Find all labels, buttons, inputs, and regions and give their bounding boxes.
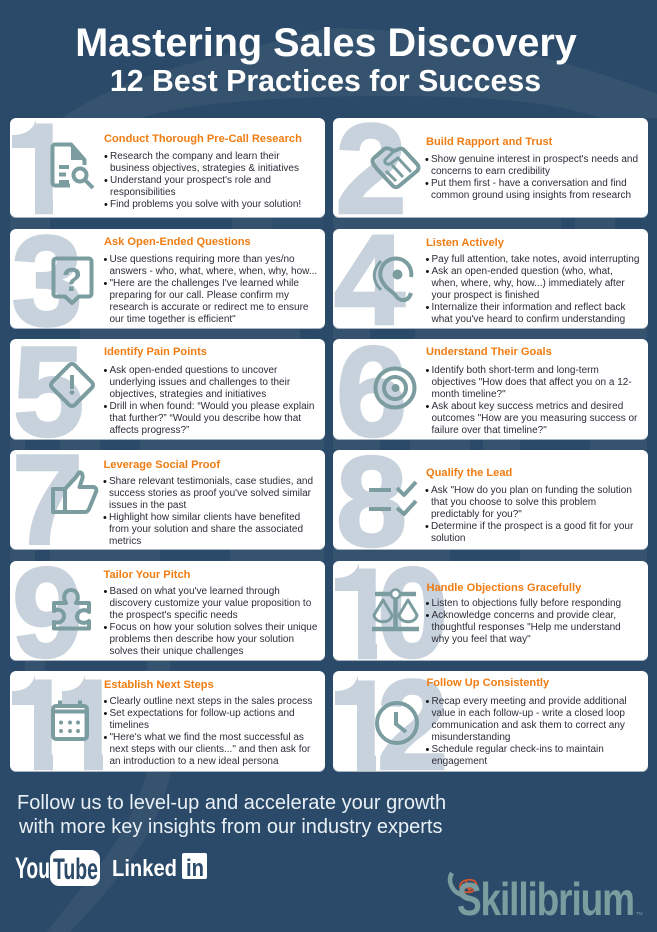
heading: Build Rapport and Trust: [426, 136, 552, 148]
icon: checklist: [369, 482, 416, 514]
heading: Identify Pain Points: [104, 346, 207, 358]
text block: metrics: [109, 536, 141, 547]
number 10: [335, 563, 444, 660]
text block: Set expectations for follow-up actions and: [110, 708, 295, 719]
text block: "Here are the challenges I've learned while: [110, 278, 299, 289]
text block: "Here's what we find the most successful as: [110, 732, 304, 743]
text block: Drill in when found: “Would you please explain: [110, 401, 314, 412]
text block: Based on what you've learned through: [110, 586, 280, 597]
text block: our time together is efficient": [110, 314, 236, 325]
text block: discovery customize your value proposition to: [110, 598, 311, 609]
text block: thoughtful responses "Help me understand: [432, 622, 621, 633]
text block: Listen to objections fully before responding: [432, 598, 621, 609]
text block: Pay full attention, take notes, avoid interrupting: [432, 254, 639, 265]
call to action text: Follow us to level-up and accelerate your growth: [17, 792, 446, 814]
heading: Establish Next Steps: [104, 679, 214, 691]
text block: solution: [431, 533, 465, 544]
LinkedIn logo: in: [186, 855, 204, 882]
panel: 10 handle objections: •: [426, 598, 429, 610]
text block: issues in the past: [109, 500, 186, 511]
text block: [103, 476, 313, 547]
text block: Ask an open-ended question (who, what,: [432, 266, 613, 277]
text block: Highlight how similar clients have benefited: [109, 512, 300, 523]
text block: answers - who, what, where, when, why, how...: [110, 266, 317, 277]
panel: 1 pre-call research: •: [104, 199, 108, 211]
text block: next steps with our clients..." and then ask for: [110, 744, 310, 755]
text block: Determine if the prospect is a good fit for your: [431, 521, 633, 532]
heading: Handle Objections Gracefully: [426, 582, 581, 594]
panel: 5 pain points: •: [104, 365, 107, 377]
text block: your prospect is finished: [432, 290, 539, 301]
panel: 1 pre-call research: •: [104, 175, 108, 187]
number 1: [12, 120, 53, 214]
panel: 12 follow up: •: [426, 696, 429, 708]
panel: 4 listen actively: •: [426, 254, 429, 266]
heading: Listen Actively: [426, 237, 504, 249]
text block: success stories as proof you've solved similar: [109, 488, 311, 499]
text block: affects progress?”: [110, 425, 189, 436]
panel: 9 tailor your pitch: •: [104, 622, 107, 634]
panel: 3 open-ended questions: •: [104, 278, 107, 290]
panel: 2 rapport and trust: •: [425, 178, 429, 190]
text block: what you've heard to confirm understanding: [432, 314, 625, 325]
text block: [104, 365, 314, 436]
text block: Use questions requiring more than yes/no: [110, 254, 295, 265]
icon: thumbs up: [53, 472, 96, 512]
heading: Tailor Your Pitch: [104, 569, 190, 581]
heading: Ask Open-Ended Questions: [104, 236, 251, 248]
text block: objectives "How does that affect you on a 12-: [432, 377, 632, 388]
panel: 12 follow up: [333, 671, 648, 771]
panel: 4 listen actively: •: [426, 302, 429, 314]
heading: Follow Up Consistently: [426, 677, 549, 689]
text block: value in each follow-up - write a closed loop: [432, 708, 625, 718]
icon: calendar: [53, 700, 87, 739]
text block: month timeline?": [432, 389, 506, 400]
text block: Focus on how your solution solves their unique: [110, 622, 317, 633]
text block: [426, 365, 638, 436]
text block: Acknowledge concerns and provide clear,: [432, 610, 616, 621]
panel: 10 handle objections: [333, 561, 648, 660]
text block: misunderstanding: [432, 732, 510, 742]
panel: 11 next steps: [10, 671, 325, 771]
panel: 1 pre-call research: [10, 118, 325, 217]
text block: research is accurate or redirect me to ensure: [110, 302, 308, 313]
text block: Ask "How do you plan on funding the solution: [431, 485, 632, 496]
number 11: [12, 676, 103, 770]
panel: 9 tailor your pitch: •: [104, 586, 107, 598]
icon: puzzle piece: [54, 590, 89, 628]
Skillibrium logo: TM: [636, 911, 643, 916]
text block: engagement: [432, 756, 487, 766]
panel: 2 rapport and trust: [333, 118, 648, 217]
icon: target: [376, 368, 414, 408]
text block: Understand your prospect's role and: [110, 175, 271, 186]
text block: predictably for you?": [431, 509, 522, 520]
text block: Recap every meeting and provide additional: [432, 696, 627, 706]
text block: when, where, why, how...) immediately after: [432, 278, 625, 289]
text block: the prospect's specific needs: [110, 610, 238, 621]
LinkedIn logo: [112, 853, 207, 882]
panel: 6 goals: •: [426, 365, 429, 377]
text block: [425, 154, 638, 201]
text block: Share relevant testimonials, case studies, and: [109, 476, 313, 487]
call to action text: [17, 792, 446, 838]
icon: document search: [52, 144, 93, 188]
panel: 1 pre-call research: •: [104, 151, 108, 163]
text block: common ground using insights from research: [431, 190, 631, 201]
panel: 8 qualify the lead: •: [425, 521, 429, 533]
text block: Research the company and learn their: [110, 151, 280, 162]
icon: question bubble: [54, 258, 92, 303]
text block: that you choose to solve this problem: [431, 497, 596, 508]
text block: [104, 151, 301, 211]
text block: underlying issues and challenges to their: [110, 377, 290, 388]
text block: Find problems you solve with your solution!: [110, 199, 301, 210]
YouTube logo: You: [15, 852, 50, 885]
icon: question bubble: ?: [62, 261, 82, 298]
text block: [425, 485, 634, 544]
text block: communication and ask them to correct any: [432, 720, 625, 730]
panel: 6 goals: [333, 339, 648, 439]
text block: Ask open-ended questions to uncover: [110, 365, 277, 376]
text block: responsibilities: [110, 187, 176, 198]
text block: timelines: [110, 720, 149, 731]
text block: Clearly outline next steps in the sales process: [110, 696, 312, 707]
panel: 6 goals: •: [426, 401, 429, 413]
text block: solves their unique challenges: [110, 646, 243, 657]
text block: Identify both short-term and long-term: [432, 365, 599, 376]
text block: [104, 254, 317, 325]
panel: 2 rapport and trust: •: [425, 154, 429, 166]
YouTube logo: [15, 850, 100, 886]
text block: [104, 696, 312, 767]
heading: Understand Their Goals: [426, 346, 552, 358]
icon: warning diamond: [49, 362, 95, 408]
icon: scales: [372, 590, 419, 629]
text block: objectives, strategies and initiatives: [110, 389, 266, 400]
number 12: [335, 676, 444, 771]
panel: 10 handle objections: •: [426, 610, 429, 622]
text block: outcomes "How are you measuring success or: [432, 413, 637, 424]
panel: 7 social proof: •: [103, 512, 107, 524]
heading: Qualify the Lead: [426, 467, 512, 479]
text block: failure over that timeline?": [432, 425, 547, 436]
panel: 5 pain points: •: [104, 401, 107, 413]
icon: handshake: [372, 148, 418, 187]
text block: from your solution and share the associated: [109, 524, 303, 535]
text block: that further?” “Would you describe how that: [110, 413, 301, 424]
panel: 11 next steps: •: [104, 708, 107, 720]
icon: ear: [374, 258, 411, 300]
title: Mastering Sales Discovery: [75, 21, 577, 65]
text block: an introduction to a new ideal persona: [110, 756, 279, 767]
text block: Internalize their information and reflect back: [432, 302, 626, 313]
Skillibrium logo: Skillibrium: [457, 873, 635, 924]
panel: 9 tailor your pitch: [10, 561, 325, 660]
text block: Show genuine interest in prospect's needs and: [431, 154, 638, 165]
panel: 8 qualify the lead: •: [425, 485, 429, 497]
text block: concerns to earn credibility: [431, 166, 550, 177]
panel: 5 pain points: [10, 339, 325, 439]
subtitle: 12 Best Practices for Success: [110, 65, 541, 98]
panel: 3 open-ended questions: •: [104, 254, 107, 266]
text block: Put them first - have a conversation and find: [431, 178, 627, 189]
heading: Conduct Thorough Pre-Call Research: [104, 133, 302, 145]
panel: 11 next steps: •: [104, 732, 107, 744]
panel: 11 next steps: •: [104, 696, 107, 708]
panel: 8 qualify the lead: [333, 450, 648, 549]
panel: 3 open-ended questions: [10, 229, 325, 328]
heading: Leverage Social Proof: [104, 459, 220, 471]
text block: [426, 254, 639, 325]
text block: [104, 586, 317, 657]
panel: 4 listen actively: •: [426, 266, 429, 278]
panel: 7 social proof: [10, 450, 325, 549]
panel: 7 social proof: •: [103, 476, 107, 488]
text block: preparing for our call. Please confirm my: [110, 290, 289, 301]
panel: 12 follow up: •: [426, 744, 429, 756]
icon: clock: [377, 703, 417, 743]
text block: business objectives, strategies & initiatives: [110, 163, 299, 174]
call to action text: with more key insights from our industry experts: [19, 816, 442, 838]
text block: Ask about key success metrics and desired: [432, 401, 623, 412]
text block: [426, 598, 621, 645]
panel: 4 listen actively: [333, 229, 648, 328]
LinkedIn logo: Linked: [112, 855, 177, 881]
text block: problems then describe how your solution: [110, 634, 294, 645]
text block: [426, 696, 627, 766]
text block: Schedule regular check-ins to maintain: [432, 744, 604, 754]
text block: why you feel that way": [432, 634, 531, 645]
